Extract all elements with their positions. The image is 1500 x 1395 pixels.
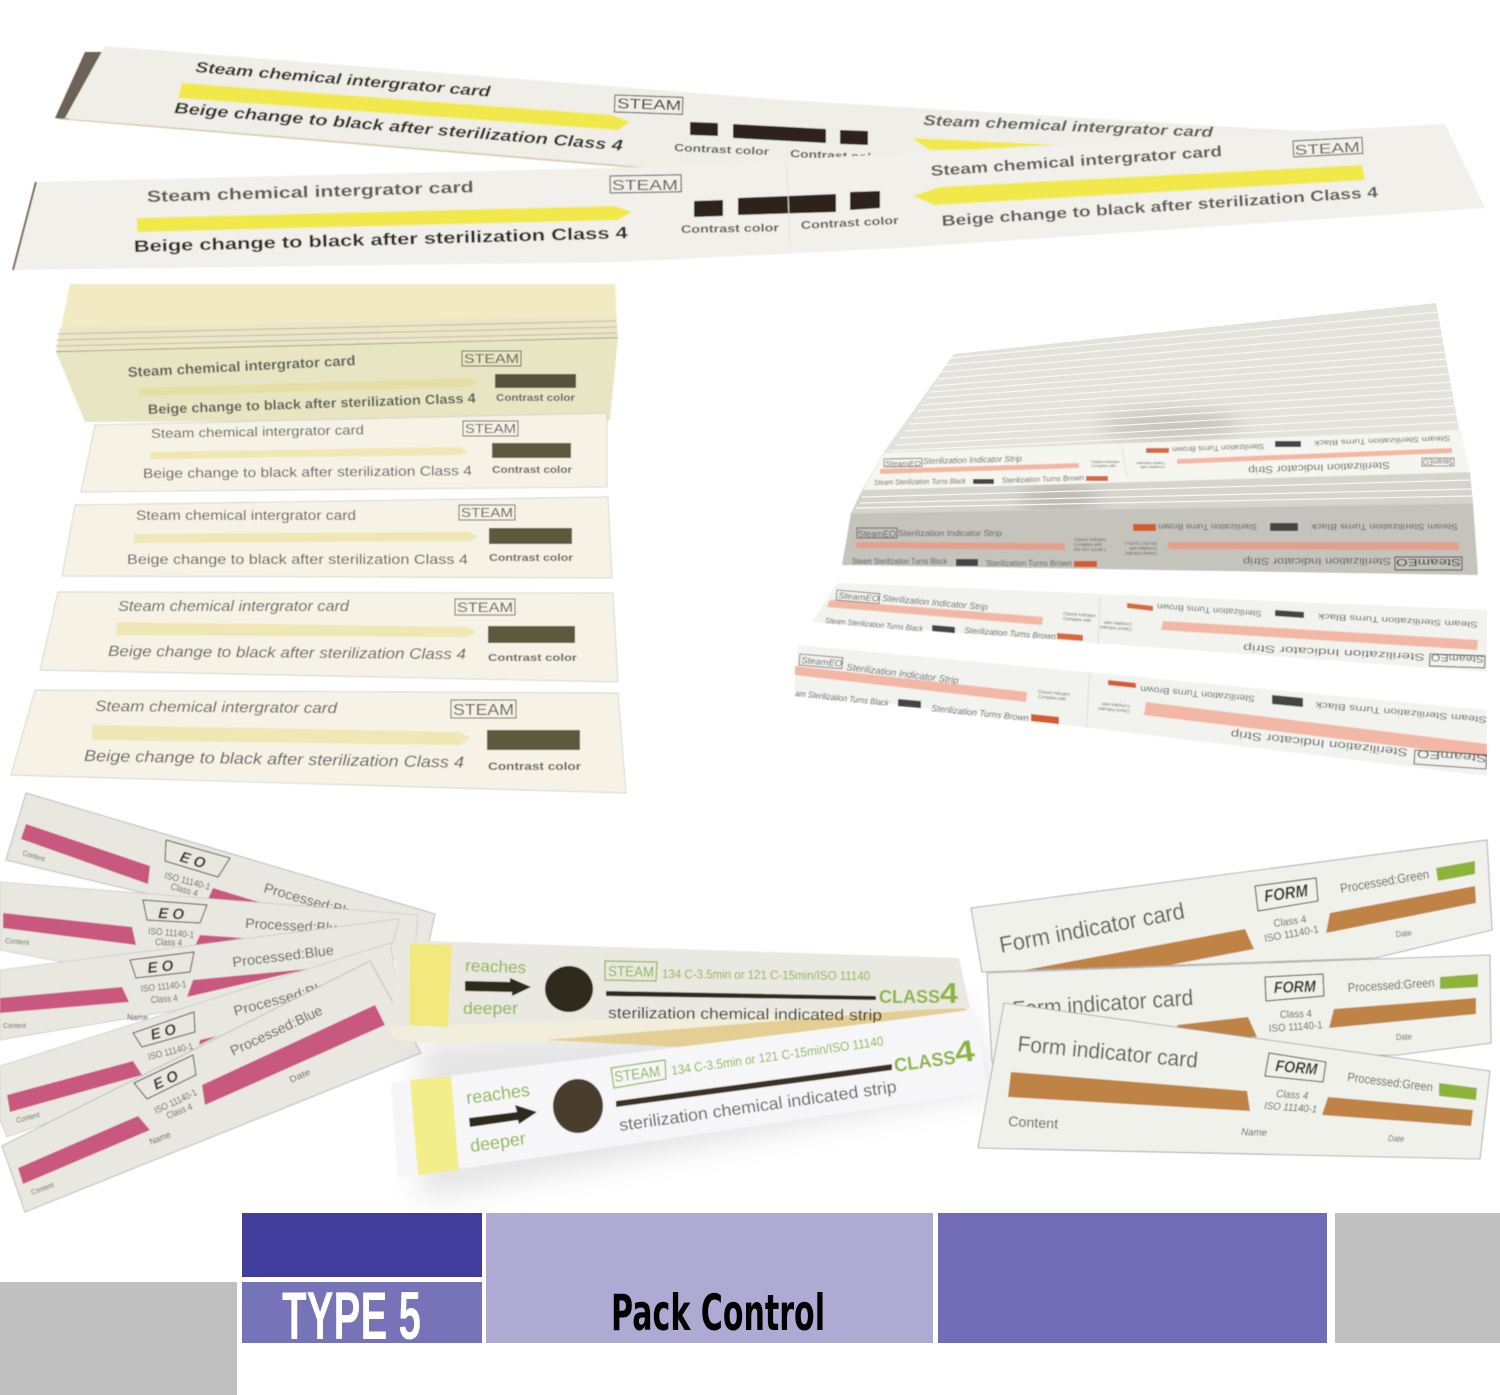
EO card 3: Content [3, 1021, 27, 1030]
card A: Steam chemical intergrator card [127, 352, 356, 380]
loose strip 2: Steam Sterilization Turns Black [1314, 700, 1487, 725]
upper long strip: Contrast color [674, 142, 769, 158]
EO card 4: Content [15, 1110, 41, 1125]
gray strip in stack: Complies with [1128, 546, 1157, 551]
card E: Steam chemical intergrator card [95, 698, 338, 717]
strip B [391, 1010, 988, 1178]
loose strip 1: SteamEO [1430, 651, 1484, 664]
EO card 4: E O [149, 1021, 178, 1044]
form card 1: ISO 11140-1 [1263, 924, 1320, 945]
card E: STEAM [453, 702, 514, 719]
form card 1: FORM [1263, 881, 1310, 906]
upper long strip: Steam chemical intergrator card [195, 59, 492, 101]
EO card 2: Processed:Blu [245, 915, 338, 936]
upper long strip: STEAM [617, 95, 681, 113]
gray strip in stack: Sterilization Indicator Strip [1243, 555, 1391, 567]
EO card 5: Processed:Blue [228, 1002, 325, 1059]
form card 3: Processed:Green [1347, 1070, 1434, 1094]
EO card 3: Processed:Blue [231, 942, 335, 970]
form card 2: Date [1396, 1031, 1412, 1042]
EO card 5: Name [148, 1129, 172, 1147]
form card 2: FORM [1274, 979, 1317, 997]
card C: Beige change to black after sterilization Class 4 [127, 551, 468, 567]
strip B: sterilization chemical indicated strip [618, 1077, 898, 1135]
form card 3: ISO 11140-1 [1264, 1100, 1317, 1116]
form card 3: Date [1388, 1133, 1405, 1144]
loose strip 2: Sterilization Indicator Strip [846, 662, 959, 687]
strip A: deeper [463, 1000, 519, 1018]
dark purple block [242, 1213, 482, 1277]
loose strip 2: Sterilization Turns Brown [931, 703, 1029, 723]
EO card 3 [0, 919, 399, 1040]
strip A: sterilization chemical indicated strip [608, 1005, 882, 1024]
loose strip 2: Class4 Indicator [1038, 689, 1071, 697]
panel: steam EO indicator strips [794, 303, 1487, 776]
type label: TYPE 5 [282, 1278, 421, 1354]
EO card 5: Content [30, 1180, 56, 1197]
EO card 5: Date [288, 1067, 312, 1085]
soft card shadow [420, 1000, 1000, 1200]
loose strip 1: Class4 Indicator [1063, 611, 1096, 618]
upper long strip: Steam chemical intergrator card [923, 113, 1215, 141]
card C: STEAM [461, 505, 513, 520]
card C [62, 497, 612, 578]
purple block [938, 1213, 1327, 1343]
form card 2: Class 4 [1280, 1008, 1312, 1021]
card A: STEAM [464, 351, 519, 366]
form card 1: Processed:Green [1339, 866, 1430, 896]
panel: bottom title band [0, 1213, 1500, 1395]
EO card 5: ISO 11140-1 [153, 1087, 199, 1117]
form card 2 [987, 955, 1491, 1062]
gray strip in stack: EN ISO 11140-1 [1074, 547, 1107, 552]
card C: Contrast color [489, 553, 573, 564]
stack top strip: Complies with [1091, 463, 1116, 468]
loose strip 1: Steam Sterilization Turns Black [825, 616, 924, 634]
loose strip 1: Complies with [1063, 616, 1092, 623]
lower long strip: Steam chemical intergrator card [147, 179, 474, 206]
form card 1 [971, 840, 1492, 972]
loose strip 1: Class4 Indicator [1099, 625, 1132, 632]
gray strip in stack: Class4 Indicator [1074, 537, 1107, 542]
loose strip 2: SteamEO [1416, 747, 1487, 764]
card B: Beige change to black after sterilization Class 4 [143, 463, 473, 481]
form card 2: Form indicator card [1012, 985, 1194, 1022]
pack control label: Pack Control [611, 1284, 825, 1342]
strip B: deeper [469, 1128, 527, 1156]
card C: Steam chemical intergrator card [136, 508, 356, 523]
card D: Contrast color [488, 652, 577, 664]
form card 3: FORM [1275, 1058, 1319, 1079]
lower long strip: Contrast color [681, 222, 780, 236]
strip A [391, 940, 970, 1048]
loose strip 1: Steam Sterilization Turns Black [1317, 612, 1478, 630]
strip A: CLASS [879, 987, 940, 1007]
gray block left [0, 1282, 237, 1395]
panel: steam integrator strips (top) [12, 46, 1485, 270]
EO card 3: E O [147, 957, 174, 977]
loose strip 1: Sterilization Indicator Strip [1242, 641, 1425, 662]
loose strip 2: Sterilization Turns Brown [1140, 684, 1255, 704]
upper long strip: Contrast color [790, 148, 885, 164]
strip B: reaches [465, 1080, 531, 1108]
form card 1: Form indicator card [997, 897, 1187, 958]
gray strip in stack: Steam Sterilization Turns Black [852, 557, 948, 566]
card E [11, 690, 626, 793]
card A [56, 338, 618, 422]
loose strip 2: Sterilization Indicator Strip [1230, 727, 1408, 758]
card A: Beige change to black after sterilization Class 4 [148, 391, 476, 417]
loose strip 1: Sterilization Turns Brown [1156, 602, 1262, 619]
form card 2: Processed:Green [1347, 976, 1435, 995]
EO card 1 [6, 793, 435, 960]
gray strip in stack: Complies with [1074, 542, 1103, 547]
panel: steam class 4 indicated strips [391, 940, 1000, 1200]
EO card 2: E O [158, 905, 185, 923]
gray strip in stack: Sterilization Indicator Strip [898, 528, 1002, 538]
EO card 1: E O [178, 849, 208, 872]
stack top strip: Sterilization Indicator Strip [1247, 459, 1390, 475]
strip A: STEAM [608, 964, 654, 981]
strip A: 134 C-3.5min or 121 C-15min/ISO 11140 [662, 967, 870, 983]
strip B: 134 C-3.5min or 121 C-15min/ISO 11140 [670, 1033, 884, 1078]
strip B: STEAM [613, 1063, 661, 1086]
card E: Contrast color [488, 761, 582, 773]
form card 1: Date [1395, 928, 1412, 939]
loose strip 2: Class4 Indicator [1097, 706, 1130, 714]
EO card 5: Class 4 [165, 1101, 194, 1122]
lower long strip [12, 124, 1485, 270]
gray strip in stack [842, 503, 1478, 575]
stack top strip: Sterilization Turns Brown [1002, 473, 1084, 485]
stack top strip: Sterilization Indicator Strip [923, 453, 1022, 466]
gray strip in stack: SteamEO [1396, 556, 1461, 568]
EO card 1: ISO 11140-1 [163, 870, 211, 893]
card B [81, 413, 607, 492]
strip B: CLASS [893, 1048, 957, 1077]
EO card 5 [2, 961, 421, 1212]
card D: Steam chemical intergrator card [118, 599, 350, 615]
pack control label [486, 1213, 933, 1343]
card D [40, 592, 618, 682]
stack top strip: Complies with [1140, 465, 1165, 470]
loose strip 1: Complies with [1103, 620, 1132, 627]
EO card 1: Processed:Blu [262, 880, 355, 920]
loose strip 1: SteamEO [838, 590, 880, 604]
lower long strip: Beige change to black after sterilization Class 4 [941, 184, 1379, 230]
EO card 1: Content [21, 848, 47, 864]
card B: STEAM [465, 421, 516, 436]
stack top strip: Steam Sterilization Turns Black [1314, 434, 1450, 448]
stacked card pages [56, 284, 618, 352]
card E: Beige change to black after sterilization Class 4 [84, 748, 464, 772]
EO card 2: Content [5, 936, 30, 947]
EO card 2: ISO 11140-1 [148, 926, 195, 941]
stack top strip [863, 430, 1470, 490]
gray strip in stack: Steam Sterilization Turns Black [1310, 522, 1458, 532]
form card 3: Class 4 [1276, 1088, 1309, 1102]
form card 2: ISO 11140-1 [1268, 1019, 1323, 1035]
loose strip 1 [812, 583, 1487, 672]
EO card 1: Class 4 [169, 881, 199, 900]
gray strip in stack: Sterilization Turns Brown [986, 559, 1072, 568]
stack top strip: Class4 Indicator [1091, 459, 1120, 464]
card D: STEAM [457, 599, 513, 615]
EO card 3: Name [127, 1013, 149, 1022]
EO card 4 [0, 943, 400, 1137]
stack top strip: SteamEO [885, 459, 921, 468]
loose strip 2 [794, 645, 1487, 776]
loose strip 1: Sterilization Indicator Strip [882, 593, 988, 612]
upper long strip [55, 46, 1445, 200]
EO card 2 [0, 882, 418, 962]
gray strip in stack: Class4 Indicator [1124, 551, 1157, 556]
form card 3: Name [1241, 1127, 1268, 1139]
lower long strip: Contrast color [801, 215, 900, 232]
stack of white strip pages [851, 303, 1473, 514]
form card 3: Form indicator card [1017, 1031, 1199, 1073]
strip B: 4 [952, 1034, 977, 1070]
card B: Steam chemical intergrator card [151, 422, 364, 441]
form card 1: Class 4 [1273, 913, 1307, 930]
panel: EO indicator card fan [0, 793, 435, 1212]
gray strip in stack: Sterilization Turns Brown [1158, 522, 1257, 532]
gray strip in stack: SteamEO [858, 529, 896, 539]
loose strip 2: Complies with [1101, 702, 1130, 709]
gray block right [1335, 1213, 1500, 1343]
strip A: reaches [465, 957, 526, 977]
form card 3: Content [1008, 1113, 1059, 1132]
stack top strip: Class4 Indicator [1136, 461, 1165, 466]
EO card 3: ISO 11140-1 [140, 979, 187, 995]
stack top strip: Sterilization Turns Brown [1172, 442, 1264, 454]
lower long strip: Steam chemical intergrator card [930, 143, 1223, 180]
gray strip in stack: EN ISO 11140-1 [1124, 541, 1157, 546]
card D: Beige change to black after sterilization Class 4 [108, 643, 466, 663]
loose strip 1: Sterilization Turns Brown [964, 625, 1057, 641]
panel: stack of beige steam cards [11, 284, 626, 793]
stack top strip: Steam Sterilization Turns Black [874, 476, 967, 487]
loose strip 2: am Sterilization Turns Black [795, 688, 890, 708]
EO card 2: Class 4 [155, 937, 182, 949]
upper long strip: Beige change to black after sterilization Class 4 [174, 100, 624, 155]
EO card 3: Class 4 [150, 993, 178, 1006]
loose strip 2: SteamEO [801, 655, 843, 669]
card A: Contrast color [496, 393, 575, 404]
strip A: 4 [940, 978, 958, 1010]
panel: form indicator cards [971, 840, 1492, 1159]
EO card 4: ISO 11140-1 [147, 1041, 194, 1063]
stack top strip: SteamEO [1423, 457, 1453, 466]
loose strip 2: Complies with [1038, 694, 1067, 701]
card B: Contrast color [492, 465, 572, 476]
lower long strip: STEAM [612, 178, 678, 194]
form card 3 [978, 1003, 1490, 1159]
EO card 4: Processed:Blu [232, 979, 329, 1019]
EO card 5: E O [151, 1067, 181, 1094]
lower long strip: STEAM [1294, 139, 1360, 158]
lower long strip: Beige change to black after sterilization Class 4 [134, 224, 629, 256]
